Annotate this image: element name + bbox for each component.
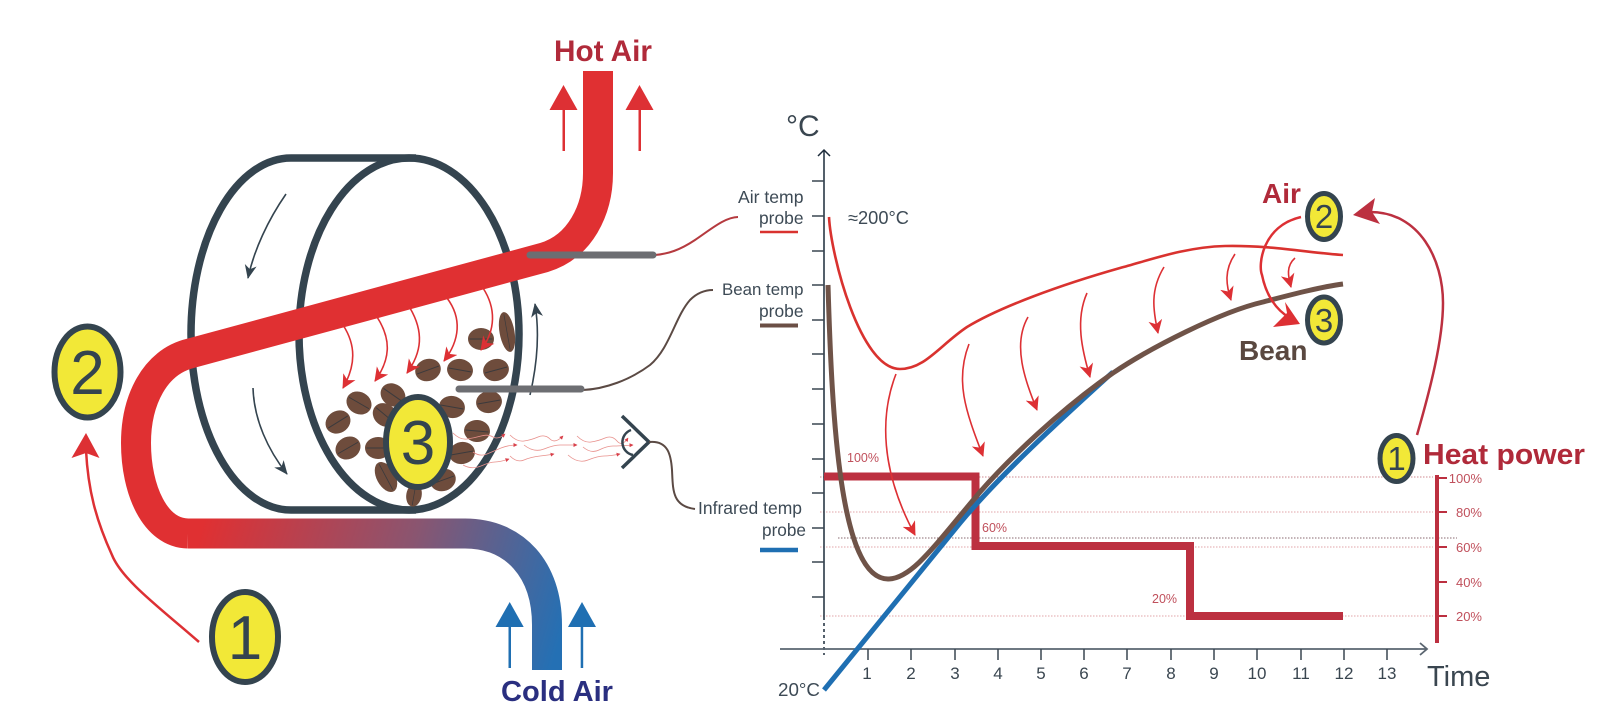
legend: bean temp probe: probe [759,301,804,321]
power scale: 20% [1456,609,1482,624]
drum front opening [299,158,519,510]
power scale: 40% [1456,575,1482,590]
small badge 2: 2 [1315,198,1333,235]
legend: air temp probe: Air temp [738,187,804,207]
air temperature probe [530,217,738,255]
x axis labels: 12 [1335,664,1353,683]
arrow from air to bean [1261,217,1301,327]
power step labels: 60% [982,521,1007,535]
badge 2: 2 [70,339,105,408]
heat arrows onto beans [343,288,493,388]
room temperature label: 20°C [778,679,820,700]
coffee beans [321,311,518,508]
infrared sensor [622,416,695,509]
power step labels: 20% [1152,592,1177,606]
panel: roaster diagram [54,35,738,708]
small badge 3 [1308,297,1340,343]
power step labels: 100% [847,451,879,465]
x axis labels: 3 [950,664,960,683]
x axis labels: 5 [1036,664,1046,683]
heat power step line [824,476,1343,616]
small badge 3: 3 [1315,302,1333,339]
badge 1 [212,592,278,682]
x axis labels: 6 [1079,664,1089,683]
legend: air temp probe [738,187,804,232]
legend: bean temp probe [722,280,804,326]
power scale [1437,471,1482,643]
cold to hot gradient duct [188,534,547,670]
x axis labels: 13 [1378,664,1396,683]
x axis [780,643,1427,660]
arrow from heat power to air [1353,198,1443,435]
cold air label: Cold Air [501,676,613,708]
badge 3 [386,397,450,487]
power scale: 60% [1456,540,1482,555]
legend: infrared temp probe [698,498,806,550]
badge 1: 1 [228,604,262,673]
x axis labels [862,664,1396,683]
cold air arrows [496,602,596,668]
small badge 2 [1308,194,1340,240]
x axis labels: 10 [1248,664,1266,683]
hot air duct [136,71,598,534]
x axis labels: 1 [862,664,872,683]
legend: bean temp probe: Bean temp [722,280,804,299]
power scale: 100% [1449,471,1482,486]
air label: Air [1262,178,1301,209]
y axis unit: °C [786,110,820,143]
heat transfer arrows [886,254,1295,535]
panel: temperature chart [698,110,1585,700]
bean temperature probe [459,290,713,390]
legend: air temp probe: probe [759,208,804,228]
start temperature label: ≈200°C [848,208,909,228]
arrow from badge 1 to badge 2 [72,433,199,642]
x axis labels: 8 [1166,664,1176,683]
x axis labels: 11 [1292,664,1310,683]
bean temperature curve [828,284,1343,579]
x axis labels: 9 [1209,664,1219,683]
power scale: 80% [1456,505,1482,520]
infrared waves [453,433,633,468]
bean label: Bean [1239,335,1307,366]
legend: infrared temp probe: probe [762,520,806,540]
badge 3: 3 [401,409,435,478]
y axis [812,150,830,655]
x axis labels: 4 [993,664,1003,683]
drum back shell [191,158,416,510]
small badge 1 [1380,436,1413,482]
x axis title: Time [1427,661,1490,693]
hot air arrows [550,85,654,151]
infrared curve [824,372,1113,690]
power grid lines [820,477,1457,616]
badge 2 [54,326,120,418]
heat power label: Heat power [1423,439,1585,471]
x axis labels: 7 [1122,664,1132,683]
drum rotation arrows [248,194,537,474]
legend: infrared temp probe: Infrared temp [698,498,802,518]
air temperature curve [829,217,1343,369]
x axis labels: 2 [906,664,916,683]
hot air label: Hot Air [554,35,652,68]
small badge 1: 1 [1387,440,1406,477]
power step labels [847,451,1177,606]
